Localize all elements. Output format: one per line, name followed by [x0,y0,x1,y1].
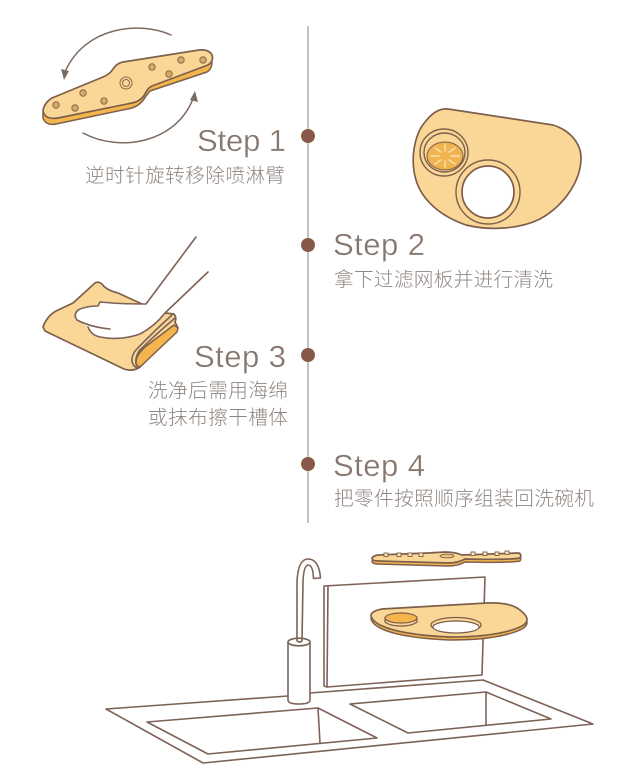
step 1 heading: Step 1 [197,123,286,158]
step 2 text: 拿下过滤网板并进行清洗 [334,269,553,291]
timeline [301,26,315,523]
step 2 heading: Step 2 [333,227,425,262]
sink counter with two basins [106,680,593,763]
icon: reinstalled filter plate [371,603,527,640]
faucet [288,559,320,704]
icon: filter plate [413,109,581,228]
step 4 heading: Step 4 [333,448,425,483]
backsplash board [324,577,485,687]
step 3 heading: Step 3 [194,339,286,374]
icon: hand wiping with cloth [43,237,208,370]
step 3 text [148,380,288,429]
step 3 text: 洗净后需用海绵 [148,380,288,402]
icon: spray arm with rotation arrows [43,28,212,143]
step 3 text: 或抹布擦干槽体 [148,407,288,429]
step 1 text: 逆时针旋转移除喷淋臂 [85,165,285,187]
icon: reinstalled spray arm [372,551,521,566]
step 4 text: 把零件按照顺序组装回洗碗机 [334,488,594,510]
